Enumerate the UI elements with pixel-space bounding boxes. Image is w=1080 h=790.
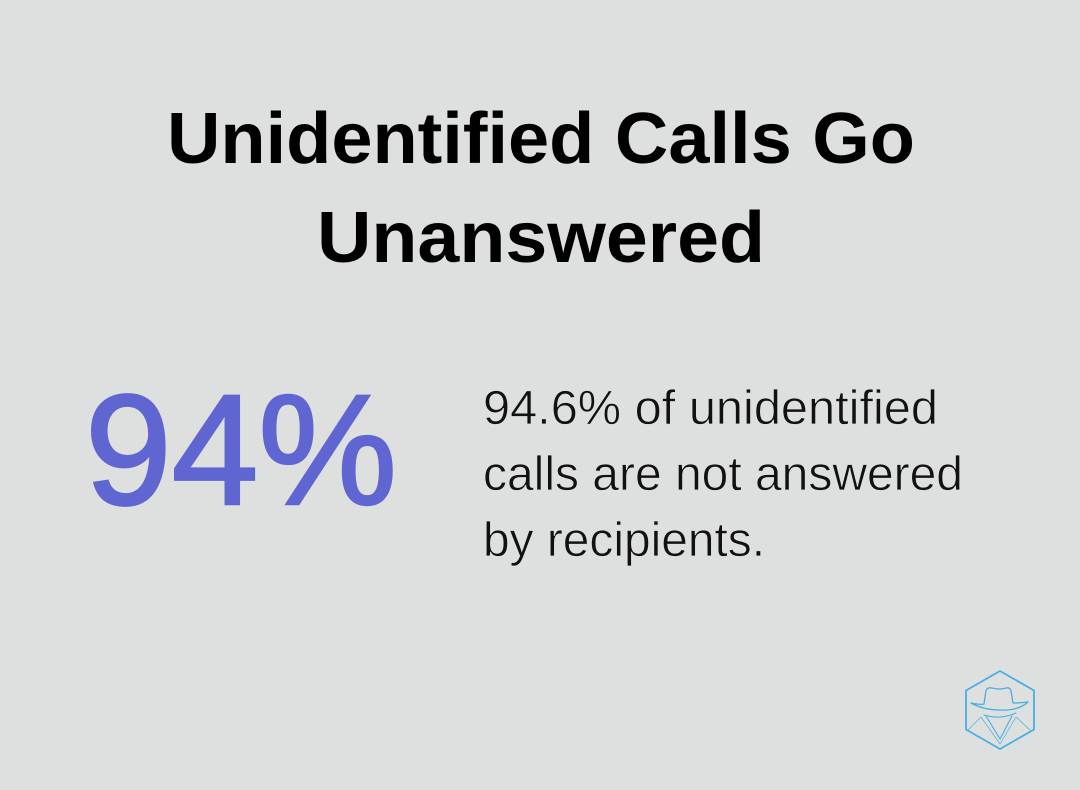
description text: 94.6% of unidentified xyxy=(483,382,938,435)
description text xyxy=(483,382,963,567)
title xyxy=(167,99,915,278)
icon: hexagon logo with spy hat xyxy=(966,671,1034,749)
description text: calls are not answered xyxy=(483,448,963,501)
title: Unidentified Calls Go xyxy=(167,99,915,179)
title: Unanswered xyxy=(317,198,765,278)
big statistic: 94%: 94% xyxy=(85,363,397,538)
description text: by recipients. xyxy=(483,514,765,567)
